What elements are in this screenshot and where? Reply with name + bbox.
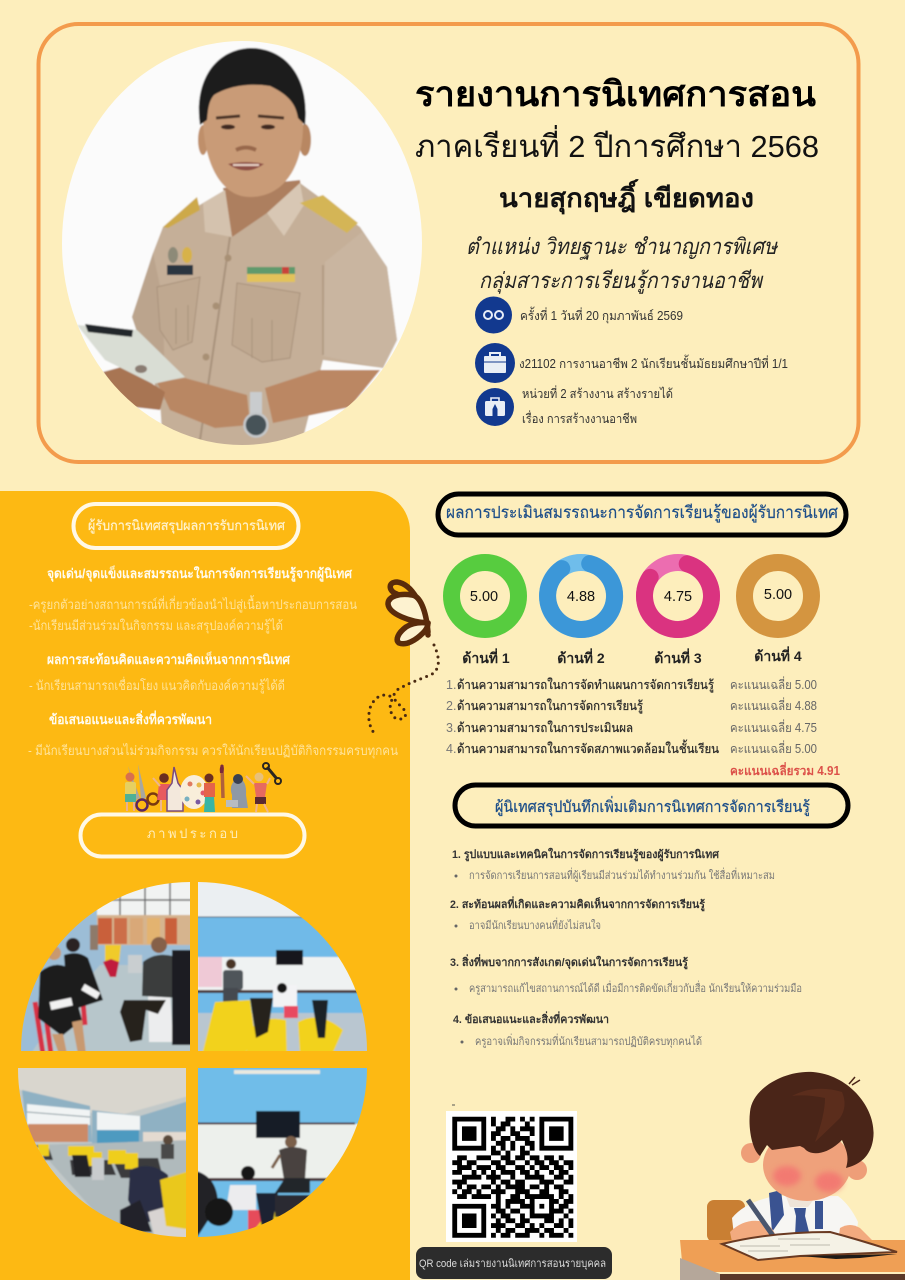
note 1: teaching model: การจัดการเรียนการสอนที่ผู้เรียนมีส่วนร่วมได้ทำงานร่วมกัน ใช้สื่อที่เหมาะสม <box>469 867 775 882</box>
note 3: observations: ครูสามารถแก้ไขสถานการณ์ได้ดี เมื่อมีการติดขัดเกี่ยวกับสื่อ นักเรียนให้ความร่วมมือ <box>469 980 802 995</box>
course details: ง21102 การงานอาชีพ 2 นักเรียนชั้นมัธยมศึกษาปีที่ 1/1 <box>519 354 788 371</box>
subject group: กลุ่มสาระการเรียนรู้การงานอาชีพ <box>479 268 764 294</box>
domain labels: ด้านที่ 1 <box>462 648 510 666</box>
note 3: observations <box>450 954 802 995</box>
domain list with average scores: ด้านความสามารถในการจัดสภาพแวดล้อมในชั้นเรียน <box>457 739 719 756</box>
heading pill: supervisor notes: ผู้นิเทศสรุปบันทึกเพิ่มเติมการนิเทศการจัดการเรียนรู้ <box>495 796 810 817</box>
icon: toolbox <box>475 343 515 383</box>
donut: domain 4 score 5.00 <box>744 562 812 630</box>
unit title: หน่วยที่ 2 สร้างงาน สร้างรายได้ <box>522 385 673 401</box>
domain list with average scores: ด้านความสามารถในการจัดการเรียนรู้ <box>457 699 643 714</box>
title: รายงานการนิเทศการสอน <box>415 75 816 114</box>
domain list with average scores: 1. <box>446 678 456 692</box>
heading pill: assessment results <box>438 494 846 535</box>
heading pill: supervisee summary <box>74 504 298 548</box>
header panel frame <box>38 24 858 462</box>
donut: domain 2 score 4.88 <box>548 562 615 630</box>
session date: ครั้งที่ 1 วันที่ 20 กุมภาพันธ์ 2569 <box>520 306 683 324</box>
reflection heading: ผลการสะท้อนคิดและความคิดเห็นจากการนิเทศ <box>47 650 291 667</box>
heading pill: supervisee summary: ผู้รับการนิเทศสรุปผลการรับการนิเทศ <box>88 518 285 534</box>
lesson topic: เรื่อง การสร้างงานอาชีพ <box>522 410 637 426</box>
note 4: suggestions: 4. ข้อเสนอแนะและสิ่งที่ควรพัฒนา <box>453 1011 609 1026</box>
domain labels: ด้านที่ 3 <box>654 648 702 666</box>
domain list with average scores: คะแนนเฉลี่ย 4.88 <box>730 697 817 713</box>
position and academic rank: ตำแหน่ง วิทยฐานะ ชำนาญการพิเศษ <box>466 234 778 260</box>
reflection text: - นักเรียนสามารถเชื่อมโยง แนวคิดกับองค์ความรู้ได้ดี <box>29 677 285 694</box>
heading pill: supervisor notes <box>455 785 848 826</box>
domain list with average scores: 2. <box>446 699 456 713</box>
illustration: boy writing at desk <box>680 1072 905 1280</box>
heading pill: illustrations <box>80 814 304 856</box>
teacher name: นายสุกฤษฎิ์ เขียดทอง <box>499 178 754 215</box>
QR caption label <box>416 1247 612 1279</box>
domain list with average scores <box>446 676 817 756</box>
note 4: suggestions: ครูอาจเพิ่มกิจกรรมที่นักเรียนสามารถปฏิบัติครบทุกคนได้ <box>475 1033 702 1048</box>
strengths text: -นักเรียนมีส่วนร่วมในกิจกรรม และสรุปองค์ความรู้ได้ <box>29 618 283 634</box>
strengths text: -ครูยกตัวอย่างสถานการณ์ที่เกี่ยวข้องนำไปสู่เนื้อหาประกอบการสอน <box>29 595 357 613</box>
QR code <box>446 1111 577 1242</box>
donut: domain 3 score 4.75 <box>644 562 712 630</box>
photo: teacher explaining to students <box>198 1068 367 1237</box>
domain list with average scores: ด้านความสามารถในการประเมินผล <box>457 721 633 735</box>
donut: domain 1 score 5.00: 5.00 <box>470 589 498 605</box>
suggestions text: - มีนักเรียนบางส่วนไม่ร่วมกิจกรรม ควรให้นักเรียนปฏิบัติกิจกรรมครบทุกคน <box>28 743 398 759</box>
yellow panel: supervisee summary <box>0 491 410 1280</box>
donut: domain 3 score 4.75: 4.75 <box>664 589 692 605</box>
icon: briefcase <box>476 388 514 426</box>
strengths heading: จุดเด่น/จุดแข็งและสมรรถนะในการจัดการเรียนรู้จากผู้นิเทศ <box>47 564 353 582</box>
note 2: reflection: อาจมีนักเรียนบางคนที่ยังไม่สนใจ <box>469 917 601 932</box>
donut: domain 1 score 5.00 <box>452 562 518 630</box>
heading pill: illustrations: ภาพประกอบ <box>147 826 238 841</box>
domain labels: ด้านที่ 2 <box>557 648 605 666</box>
portrait photo of the teacher <box>55 35 430 455</box>
doodle: loops and dotted trail <box>369 582 438 736</box>
note 2: reflection <box>450 896 705 932</box>
heading pill: assessment results: ผลการประเมินสมรรถนะการจัดการเรียนรู้ของผู้รับการนิเทศ <box>446 503 838 523</box>
domain labels: ด้านที่ 4 <box>754 646 802 664</box>
icon: glasses <box>475 296 512 334</box>
note 1: teaching model <box>452 847 775 882</box>
note 4: suggestions <box>453 1011 702 1048</box>
overall average score: คะแนนเฉลี่ยรวม 4.91 <box>730 762 840 778</box>
photo: teacher at front with students <box>198 882 367 1051</box>
domain list with average scores: คะแนนเฉลี่ย 4.75 <box>730 719 817 735</box>
domain list with average scores: 4. <box>446 742 456 756</box>
donut: domain 2 score 4.88: 4.88 <box>567 589 595 605</box>
suggestions heading: ข้อเสนอแนะและสิ่งที่ควรพัฒนา <box>49 710 212 727</box>
clip art: children with craft tools <box>125 763 281 812</box>
domain labels <box>462 646 802 666</box>
domain list with average scores: คะแนนเฉลี่ย 5.00 <box>730 676 817 692</box>
note 1: teaching model: 1. รูปแบบและเทคนิคในการจัดการเรียนรู้ของผู้รับการนิเทศ <box>452 847 720 862</box>
subtitle: semester: ภาคเรียนที่ 2 ปีการศึกษา 2568 <box>415 125 819 164</box>
domain list with average scores: คะแนนเฉลี่ย 5.00 <box>730 740 817 756</box>
domain list with average scores: 3. <box>446 721 456 735</box>
strengths text <box>29 595 357 634</box>
small mark above QR code <box>452 1104 455 1106</box>
photo: wide view of classroom <box>18 1068 186 1237</box>
photo: supervisors seated in classroom <box>21 882 190 1051</box>
QR caption label: QR code เล่มรายงานนิเทศการสอนรายบุคคล <box>419 1258 606 1270</box>
donut: domain 4 score 5.00: 5.00 <box>764 587 792 603</box>
domain list with average scores: ด้านความสามารถในการจัดทำแผนการจัดการเรียนรู้ <box>457 678 714 693</box>
note 3: observations: 3. สิ่งที่พบจากการสังเกต/จุดเด่นในการจัดการเรียนรู้ <box>450 954 688 970</box>
note 2: reflection: 2. สะท้อนผลที่เกิดและความคิดเห็นจากการจัดการเรียนรู้ <box>450 896 705 912</box>
